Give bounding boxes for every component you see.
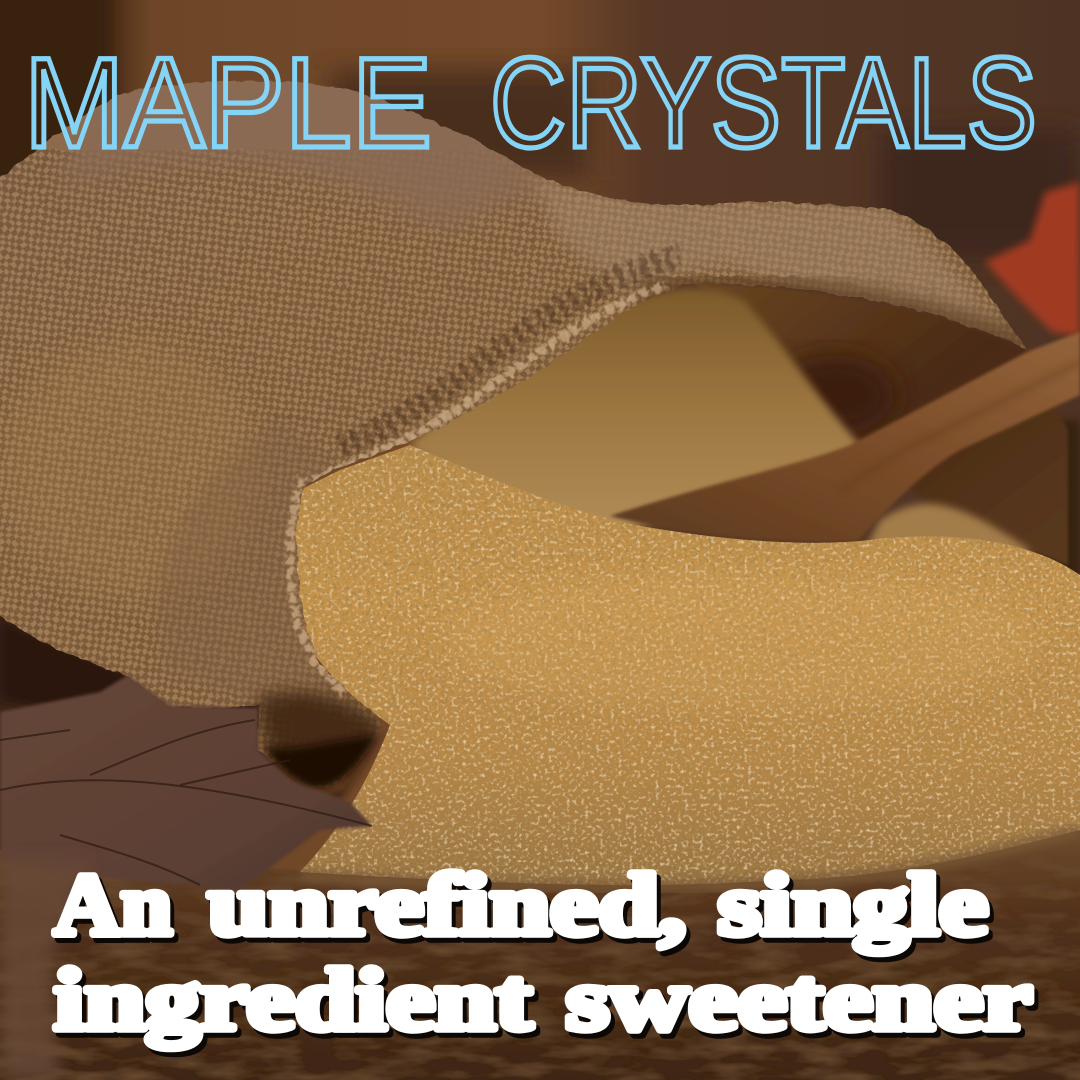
- tagline shadow: sweetener: [570, 957, 1036, 1054]
- leaf veins: [0, 720, 372, 885]
- tagline shadow: unrefined,: [212, 862, 690, 959]
- rim highlight: [312, 285, 665, 480]
- tagline text: An: [54, 857, 172, 954]
- tagline text: single: [718, 857, 988, 954]
- darkest part of sack interior: [775, 355, 895, 435]
- weave: [0, 148, 1026, 760]
- leaf shadow over stump, lower left: [0, 860, 90, 1080]
- spoon grain: [840, 362, 1080, 490]
- vertical rope highlight: [290, 478, 345, 695]
- sack interior shadow: [693, 283, 1068, 565]
- title word: Maple: MAPLE: [24, 32, 432, 175]
- tagline shadow and text: [54, 857, 1036, 1054]
- sack body: [0, 80, 1026, 787]
- speckled rim: [340, 255, 680, 445]
- hem: lower left band: [159, 426, 339, 699]
- crystals front pile: [289, 445, 1080, 885]
- wooden stump: [0, 825, 1080, 1080]
- tagline shadow: An: [58, 862, 176, 959]
- crystals inside the sack: [410, 288, 860, 530]
- dark gap under the sack: [0, 620, 390, 800]
- wooden spoon: [610, 332, 1080, 542]
- tagline shadow: [58, 862, 1036, 1054]
- burlap sack: [0, 80, 1026, 788]
- red maple leaf: [985, 182, 1080, 336]
- warm lower body: [0, 340, 260, 600]
- title: Maple Crystals: [24, 32, 1037, 175]
- dark hole beneath sack: [262, 735, 378, 788]
- dried leaf: [0, 675, 372, 890]
- tagline shadow: ingredient: [58, 957, 536, 1054]
- tagline text: ingredient: [54, 952, 532, 1049]
- inner rim shadow: [640, 289, 1027, 350]
- crystals behind spoon, right side: [850, 504, 1030, 600]
- hem bottom shadow: [258, 692, 385, 790]
- crystal bright band: [440, 570, 1040, 710]
- blurred grey top fold: [68, 80, 545, 230]
- tagline text: sweetener: [566, 952, 1032, 1049]
- crystal-to-wood transition: [300, 830, 1080, 887]
- tagline text: unrefined,: [208, 857, 686, 954]
- tagline shadow: single: [722, 862, 992, 959]
- tagline text: [54, 857, 1032, 1049]
- upper right fold: [536, 180, 1008, 334]
